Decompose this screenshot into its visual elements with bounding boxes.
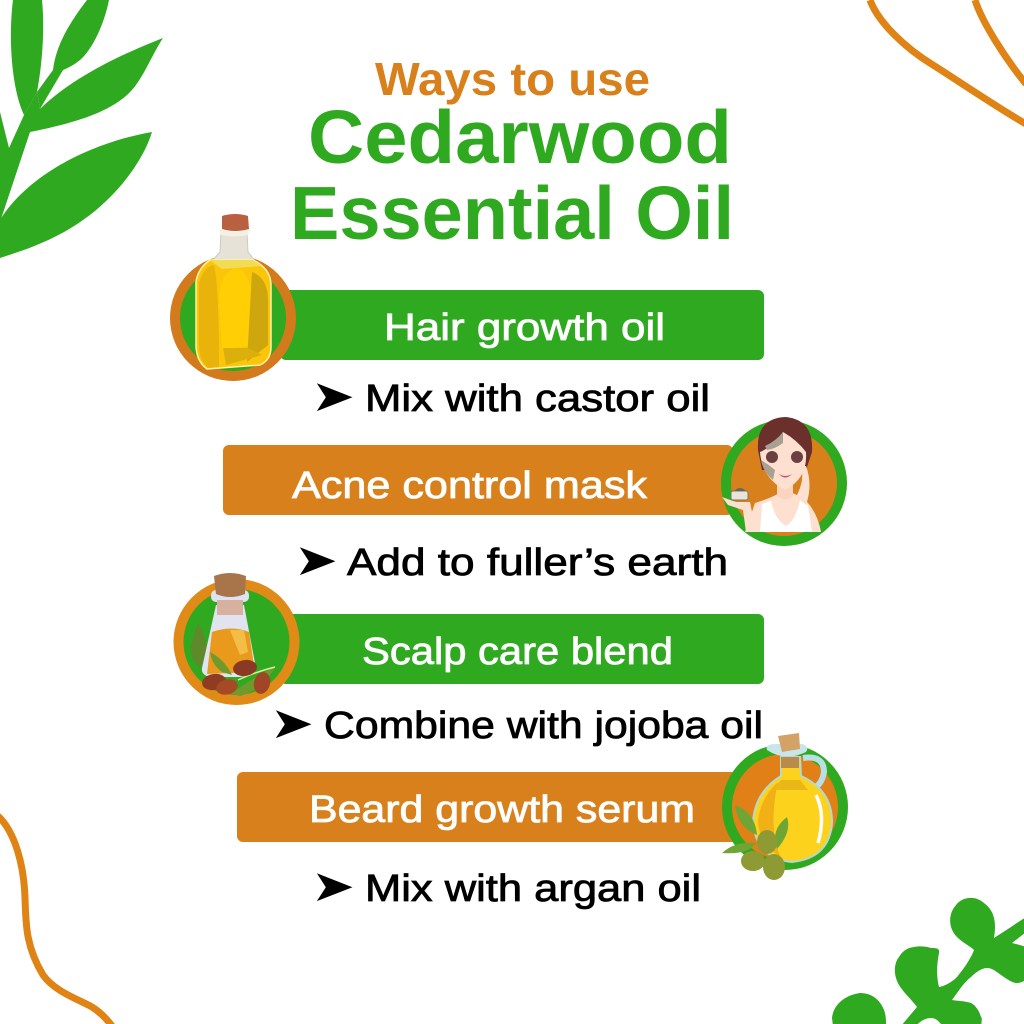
- title: [290, 53, 734, 255]
- banner: Beard growth serum: Beard growth serum: [309, 789, 695, 831]
- item 1: hair growth oil: [170, 214, 764, 422]
- icon: olive oil jug: [722, 733, 848, 880]
- subtext: Mix with argan oil: Mix with argan oil: [365, 868, 701, 910]
- banner: Beard growth serum: [237, 772, 737, 842]
- title line: Cedarwood: Cedarwood: [308, 95, 732, 179]
- item 2: acne control mask: [223, 417, 847, 586]
- icon: woman with clay face mask: [721, 417, 847, 546]
- banner: Scalp care blend: [280, 614, 764, 684]
- subtext: Mix with argan oil: [311, 861, 701, 912]
- icon: jojoba oil bottle: [174, 573, 300, 705]
- subtext: Combine with jojoba oil: ➤: [270, 698, 314, 749]
- banner: Acne control mask: [223, 445, 733, 515]
- item 4: beard growth serum: [237, 733, 848, 912]
- item 3: scalp care blend: [174, 573, 764, 749]
- decoration: bottom-right leaf sprig: [895, 898, 1024, 1024]
- subtext: Add to fuller's earth: [294, 535, 728, 586]
- banner: Hair growth oil: Hair growth oil: [384, 307, 665, 349]
- decoration: bottom-right lower blob: [832, 993, 886, 1024]
- banner: Scalp care blend: Scalp care blend: [362, 631, 673, 673]
- title line: Ways to use: Ways to use: [375, 53, 650, 105]
- banner: Hair growth oil: [280, 290, 764, 360]
- decoration: bottom-left curved line: [0, 816, 112, 1024]
- subtext: Combine with jojoba oil: [270, 698, 763, 749]
- subtext: Add to fuller's earth: ➤: [294, 535, 338, 586]
- subtext: Mix with castor oil: ➤: [311, 371, 355, 422]
- banner: Acne control mask: Acne control mask: [292, 465, 648, 507]
- title line: Essential Oil: Essential Oil: [290, 171, 734, 255]
- subtext: Mix with castor oil: Mix with castor oil: [365, 378, 710, 420]
- icon: oil bottle: [170, 214, 296, 381]
- subtext: Mix with argan oil: ➤: [311, 861, 355, 912]
- subtext: Combine with jojoba oil: Combine with jojoba oil: [324, 705, 763, 747]
- decoration: top-left leaf branch: [0, 0, 163, 258]
- subtext: Add to fuller's earth: Add to fuller’s earth: [347, 542, 728, 584]
- subtext: Mix with castor oil: [311, 371, 710, 422]
- decoration: top-right curved lines: [870, 0, 1024, 124]
